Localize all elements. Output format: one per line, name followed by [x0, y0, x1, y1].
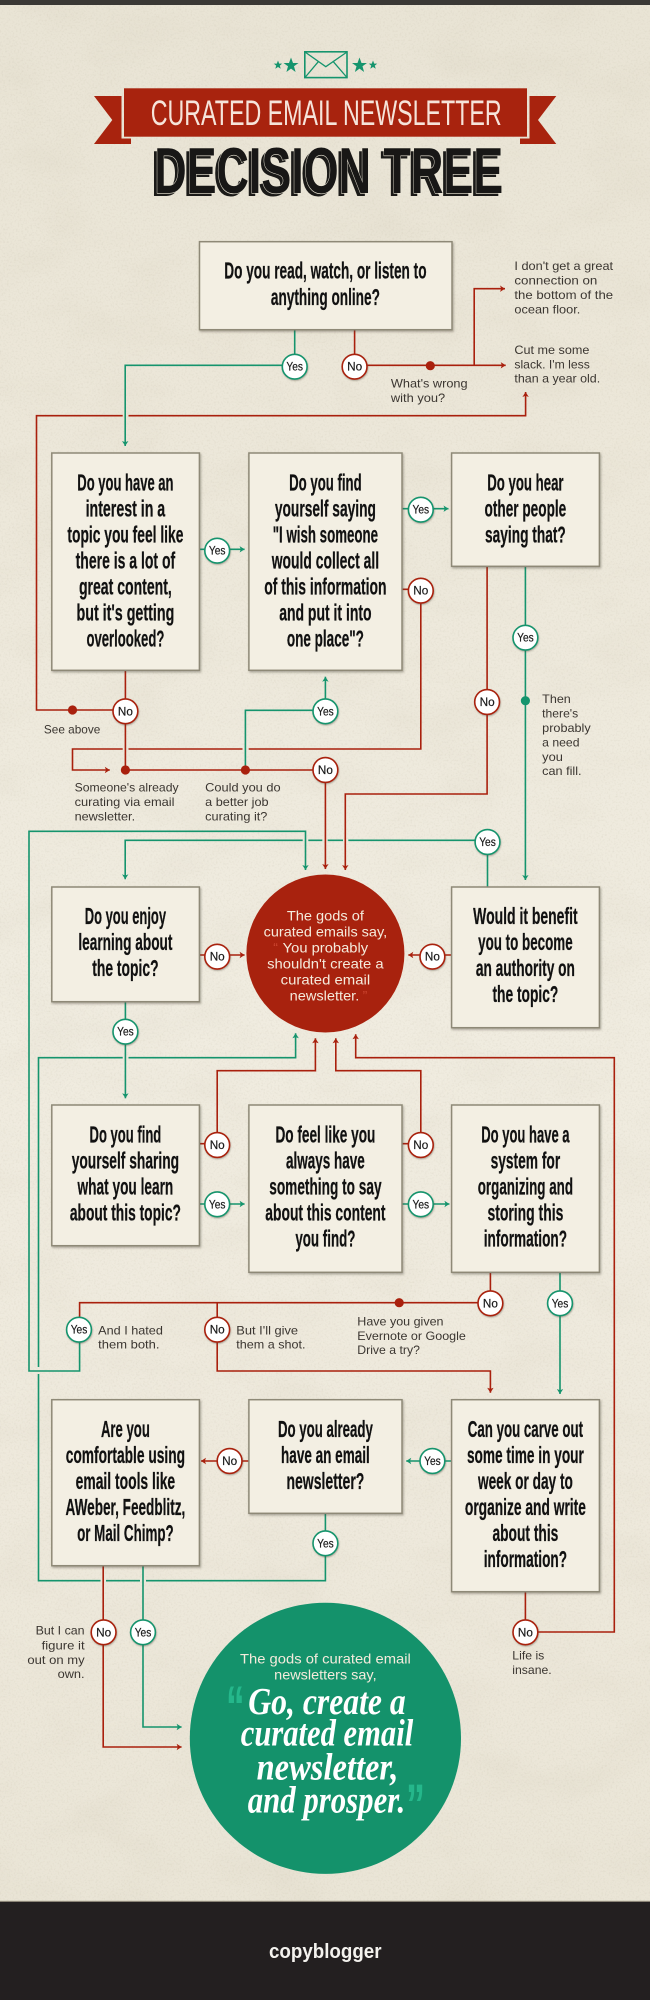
no nodes	[91, 354, 538, 1645]
panel: comfortable with email tools question: or Mail Chimp?	[77, 1520, 174, 1546]
verdict script quote	[241, 1681, 414, 1821]
note: then there's probably a need: Then	[542, 692, 571, 706]
panel: comfortable with email tools question: AWeber, Feedblitz,	[66, 1494, 185, 1520]
note: someone's already curating: newsletter.	[75, 810, 135, 824]
no nodes: No	[210, 1323, 225, 1337]
panel: enjoy learning question	[52, 887, 199, 1002]
note: but I can figure it out: But I can	[36, 1624, 85, 1638]
red verdict circle: “	[273, 939, 278, 955]
no nodes: No	[347, 360, 362, 374]
note: what's wrong with you: with you?	[390, 391, 446, 405]
note: but I'll give them a shot: them a shot.	[236, 1337, 306, 1351]
note: and I hated them both: And I hated	[98, 1323, 163, 1337]
note: cut me some slack: slack. I'm less	[514, 357, 590, 371]
panel: enjoy learning question: learning about	[78, 929, 173, 955]
yes nodes: Yes	[424, 1454, 441, 1468]
note: ocean floor: the bottom of the	[514, 288, 613, 302]
panel: sharing what you learn question: what you learn	[77, 1173, 173, 1199]
panel: become an authority question: the topic?	[492, 981, 558, 1007]
panel: wish someone would collect question: one place"?	[287, 626, 364, 652]
panel: hear other people question: other people	[485, 496, 566, 522]
verdict script quote: curated email	[241, 1712, 414, 1754]
panel: carve out time question	[452, 1400, 599, 1592]
no nodes: No	[210, 1138, 225, 1152]
panel: interest in a topic question: overlooked?	[86, 626, 164, 652]
no nodes: No	[425, 950, 440, 964]
panel: wish someone would collect question: of this information	[264, 574, 387, 600]
note: what's wrong with you	[390, 377, 468, 405]
yes nodes: Yes	[412, 503, 429, 517]
red verdict circle: shouldn't create a	[267, 955, 384, 971]
yes nodes: Yes	[479, 835, 496, 849]
green verdict circle	[190, 1603, 461, 1874]
panel: interest in a topic question: great content,	[79, 574, 172, 600]
verdict script quote: Go, create a	[248, 1681, 406, 1723]
panel: always have something to say question: always have	[286, 1147, 365, 1173]
note: then there's probably a need: you	[542, 750, 563, 764]
panel: system for organizing question: information?	[484, 1225, 567, 1251]
note: then there's probably a need: can fill.	[542, 764, 582, 778]
yes nodes: Yes	[517, 631, 534, 645]
panel: sharing what you learn question: Do you find	[90, 1121, 161, 1147]
no nodes: No	[480, 695, 495, 709]
no nodes: No	[222, 1454, 237, 1468]
closing quotation mark: ”	[406, 1773, 425, 1838]
note: see above: See above	[44, 722, 101, 736]
yes nodes: Yes	[135, 1625, 151, 1639]
panel: always have something to say question: about this content	[265, 1199, 386, 1225]
panel: become an authority question: Would it benefit	[473, 903, 578, 929]
note: then there's probably a need: a need	[542, 735, 580, 749]
no nodes: No	[210, 950, 225, 964]
panel: system for organizing question: system for	[491, 1147, 560, 1173]
panel: always have something to say question: you find?	[295, 1225, 355, 1251]
note: life is insane: Life is	[512, 1648, 544, 1662]
note: evernote or google drive: Have you given	[357, 1314, 443, 1328]
panel: hear other people question: saying that?	[485, 522, 566, 548]
no nodes: No	[413, 1138, 429, 1152]
panel: comfortable with email tools question: email tools like	[76, 1468, 175, 1494]
yes nodes: Yes	[71, 1323, 87, 1337]
note: but I'll give them a shot	[236, 1323, 306, 1351]
panel: read watch listen question: anything online?	[271, 284, 380, 310]
note: life is insane: insane.	[512, 1663, 552, 1677]
no nodes: No	[413, 584, 429, 598]
verdict intro text	[240, 1650, 411, 1682]
panel: become an authority question: an authority on	[476, 955, 575, 981]
panel: always have something to say question: Do feel like you	[275, 1121, 375, 1147]
note: evernote or google drive: Evernote or Google	[357, 1329, 466, 1343]
panel: sharing what you learn question: yourself sharing	[72, 1147, 179, 1173]
no nodes: No	[118, 704, 133, 718]
note: ocean floor	[514, 259, 614, 316]
panel: interest in a topic question: interest in a	[86, 496, 166, 522]
note: ocean floor: I don't get a great	[514, 259, 614, 273]
no nodes: No	[483, 1296, 498, 1310]
panel: become an authority question	[452, 887, 599, 1028]
panel: wish someone would collect question	[249, 453, 402, 670]
panel: system for organizing question	[452, 1105, 599, 1272]
note: someone's already curating: Someone's already	[75, 781, 179, 795]
panel: comfortable with email tools question: Are you	[101, 1416, 150, 1442]
note: but I'll give them a shot: But I'll give	[236, 1323, 298, 1337]
panel: interest in a topic question: there is a lot of	[76, 548, 175, 574]
panel: interest in a topic question	[52, 453, 199, 670]
panel: comfortable with email tools question	[52, 1400, 199, 1566]
note: ocean floor: ocean floor.	[514, 302, 580, 316]
footer band	[0, 1901, 650, 2000]
panel: read watch listen question	[200, 242, 452, 330]
note: and I hated them both: them both.	[98, 1337, 160, 1351]
yes nodes: Yes	[209, 1197, 226, 1211]
icon: envelope with stars	[274, 52, 377, 78]
green connector lines	[29, 330, 560, 1727]
red verdict circle: curated emails say,	[264, 923, 387, 939]
opening quotation mark: “	[226, 1675, 245, 1740]
panel: enjoy learning question: Do you enjoy	[85, 903, 166, 929]
note: could you do a better job	[205, 781, 281, 824]
yes nodes: Yes	[552, 1296, 568, 1310]
panel: wish someone would collect question: would collect all	[271, 548, 379, 574]
panel: read watch listen question: Do you read, watch, or listen to	[224, 258, 427, 284]
panel: interest in a topic question: Do you have an	[77, 470, 174, 496]
title: decision tree: DECISION TREE	[151, 138, 500, 210]
yes nodes: Yes	[317, 704, 334, 718]
panel: already have a newsletter question: have an email	[281, 1442, 370, 1468]
note: then there's probably a need: probably	[542, 721, 591, 735]
panel: always have something to say question: something to say	[269, 1173, 382, 1199]
panel: enjoy learning question: the topic?	[92, 955, 159, 981]
note: then there's probably a need	[542, 692, 591, 778]
title banner ribbon	[94, 88, 556, 144]
title: decision tree: DECISION TREE	[154, 135, 503, 207]
red verdict circle: curated email	[281, 971, 370, 987]
note: could you do a better job: curating it?	[205, 810, 268, 824]
note: what's wrong with you: What's wrong	[391, 377, 468, 391]
note: evernote or google drive	[357, 1314, 466, 1357]
panel: wish someone would collect question: Do you find	[289, 470, 362, 496]
note: someone's already curating	[75, 781, 179, 824]
yes nodes	[67, 354, 572, 1645]
note: but I can figure it out: out on my	[27, 1653, 85, 1667]
red verdict circle: newsletter.	[290, 987, 359, 1003]
panel: become an authority question: you to become	[478, 929, 573, 955]
yes nodes: Yes	[117, 1025, 134, 1039]
panel: already have a newsletter question: newsletter?	[286, 1468, 364, 1494]
verdict intro text: newsletters say,	[274, 1666, 377, 1682]
title: decision tree	[151, 135, 503, 210]
note: someone's already curating: curating via email	[75, 795, 174, 809]
note: cut me some slack: than a year old.	[514, 372, 600, 386]
red verdict circle: The gods of	[287, 907, 364, 923]
panel: already have a newsletter question: Do you already	[278, 1416, 373, 1442]
panel: carve out time question: information?	[484, 1546, 567, 1572]
verdict intro text: The gods of curated email	[240, 1650, 411, 1666]
panel: carve out time question: week or day to	[477, 1468, 573, 1494]
red verdict circle: ”	[363, 987, 368, 1003]
yes nodes: Yes	[412, 1197, 429, 1211]
red verdict circle: You probably	[283, 939, 368, 955]
yes nodes: Yes	[209, 544, 226, 558]
panel: system for organizing question: organizing and	[478, 1173, 573, 1199]
panel: system for organizing question: Do you have a	[481, 1121, 570, 1147]
panel: carve out time question: about this	[492, 1520, 558, 1546]
verdict script quote: and prosper.	[248, 1779, 405, 1821]
panel: sharing what you learn question: about this topic?	[70, 1199, 181, 1225]
panel: interest in a topic question: topic you feel like	[67, 522, 183, 548]
no nodes: No	[518, 1625, 533, 1639]
note: then there's probably a need: there's	[542, 706, 578, 720]
note: but I can figure it out	[27, 1624, 85, 1681]
yes nodes: Yes	[286, 360, 303, 374]
footer logo text: copyblogger	[269, 1940, 382, 1963]
panel: always have something to say question	[249, 1105, 402, 1272]
no nodes: No	[96, 1625, 111, 1639]
note: cut me some slack	[514, 343, 600, 386]
red connector lines	[36, 289, 614, 1747]
note: life is insane	[512, 1648, 552, 1677]
top dark bar	[0, 0, 650, 5]
panel: wish someone would collect question: "I wish someone	[273, 522, 378, 548]
panel: system for organizing question: storing this	[487, 1199, 563, 1225]
panel: hear other people question	[452, 453, 599, 566]
panel: interest in a topic question: but it's getting	[76, 600, 174, 626]
yes nodes: Yes	[317, 1536, 334, 1550]
note: could you do a better job: a better job	[205, 795, 269, 809]
note: could you do a better job: Could you do	[205, 781, 281, 795]
junction dots	[68, 361, 530, 1307]
note: but I can figure it out: figure it	[42, 1638, 85, 1652]
note: cut me some slack: Cut me some	[514, 343, 590, 357]
panel: already have a newsletter question	[249, 1400, 402, 1513]
panel: wish someone would collect question: yourself saying	[275, 496, 376, 522]
note: but I can figure it out: own.	[58, 1667, 85, 1681]
no nodes: No	[318, 763, 333, 777]
note: and I hated them both	[98, 1323, 163, 1351]
panel: comfortable with email tools question: comfortable using	[66, 1442, 185, 1468]
red verdict circle	[246, 874, 404, 1032]
verdict script quote: newsletter,	[257, 1746, 398, 1788]
note: ocean floor: connection on	[514, 274, 597, 288]
panel: wish someone would collect question: and put it into	[279, 600, 372, 626]
panel: sharing what you learn question	[52, 1105, 199, 1246]
note: evernote or google drive: Drive a try?	[357, 1343, 420, 1357]
panel: hear other people question: Do you hear	[487, 470, 564, 496]
